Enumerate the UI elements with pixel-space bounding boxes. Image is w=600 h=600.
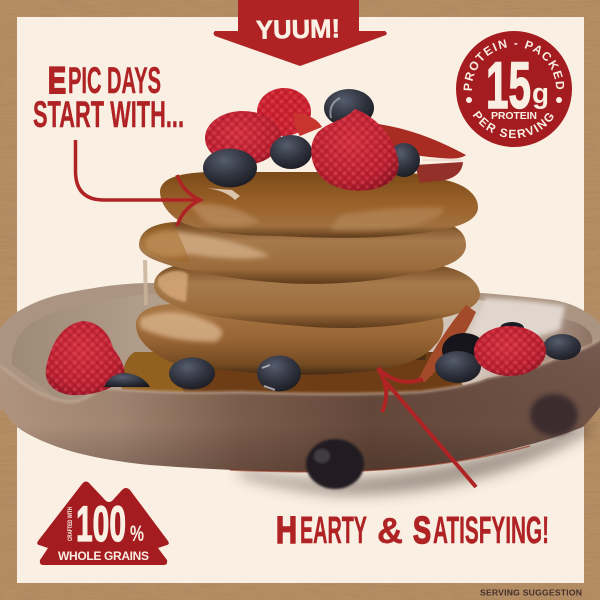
badge label: WHOLE GRAINS — [58, 549, 149, 563]
arrow to bottom pancake — [378, 368, 476, 487]
blueberry front 1 — [169, 358, 215, 390]
plate — [0, 283, 600, 472]
heading: epic days start with: E — [48, 60, 66, 101]
raspberry top — [257, 88, 311, 136]
pancake 3 — [154, 264, 480, 328]
banner text: YUUM! — [256, 13, 340, 45]
heading: epic days start with: START WITH... — [33, 94, 184, 135]
raspberry plate left — [46, 321, 124, 395]
blueberry plate left — [104, 373, 150, 387]
whole grains badge — [37, 482, 169, 565]
serving suggestion note: SERVING SUGGESTION — [480, 588, 582, 598]
protein badge — [456, 31, 572, 147]
yuum banner arrow — [214, 0, 387, 66]
stack shadow core — [180, 215, 435, 360]
badge curved text bottom: PER SERVING — [472, 110, 554, 138]
raspberry plate right — [474, 326, 546, 376]
pancake stack — [136, 172, 480, 375]
blurred blueberry on rim — [530, 394, 578, 436]
blueberry front 2 — [257, 356, 301, 392]
syrup puddle light — [122, 352, 185, 395]
blueberry front — [203, 148, 257, 188]
caption: hearty and satisfying: & — [377, 510, 403, 551]
badge side text: CRAFTED WITH — [67, 507, 74, 541]
caption: hearty and satisfying: H — [276, 510, 297, 552]
badge unit: g — [532, 78, 549, 110]
blueberries right — [442, 333, 486, 367]
plate rim highlight — [0, 340, 600, 402]
blueberry top — [324, 89, 374, 127]
heading: epic days start with — [33, 60, 184, 135]
plate inner — [12, 294, 592, 400]
plate front face — [0, 340, 600, 472]
caption: hearty and satisfying: EARTY — [300, 510, 367, 552]
pancake 4 — [136, 304, 443, 375]
blueberry behind — [388, 143, 420, 177]
raspberry big — [311, 109, 399, 191]
blueberry centre — [270, 135, 312, 169]
plate red bottom edge — [230, 446, 530, 472]
raspberry left top — [205, 111, 281, 165]
strawberry slices — [378, 124, 476, 382]
plate right highlight — [470, 298, 565, 339]
caption: hearty and satisfying — [276, 510, 549, 552]
strawberry piece — [294, 113, 322, 136]
badge label: PROTEIN — [491, 110, 537, 122]
badge percent: % — [130, 521, 144, 546]
badge dots — [466, 97, 562, 103]
blurred blueberry in front — [306, 439, 364, 489]
syrup on top — [205, 188, 240, 200]
pancake 2 — [139, 222, 466, 284]
badge 100: 100 — [76, 496, 126, 552]
syrup drip — [145, 260, 146, 305]
plate shadow — [240, 420, 590, 494]
heading: epic days start with: PIC DAYS — [68, 60, 161, 101]
badge number: 15 — [486, 48, 531, 122]
syrup puddle — [122, 352, 470, 395]
pancake 1 — [160, 172, 478, 238]
badge curved text top: PROTEIN - PACKED — [464, 39, 564, 90]
arrow to top pancake — [76, 140, 200, 226]
plate face shading — [0, 340, 600, 472]
plate back rim — [0, 283, 600, 410]
syrup on pancake 2 — [140, 222, 190, 262]
caption: hearty and satisfying: S — [413, 510, 431, 552]
